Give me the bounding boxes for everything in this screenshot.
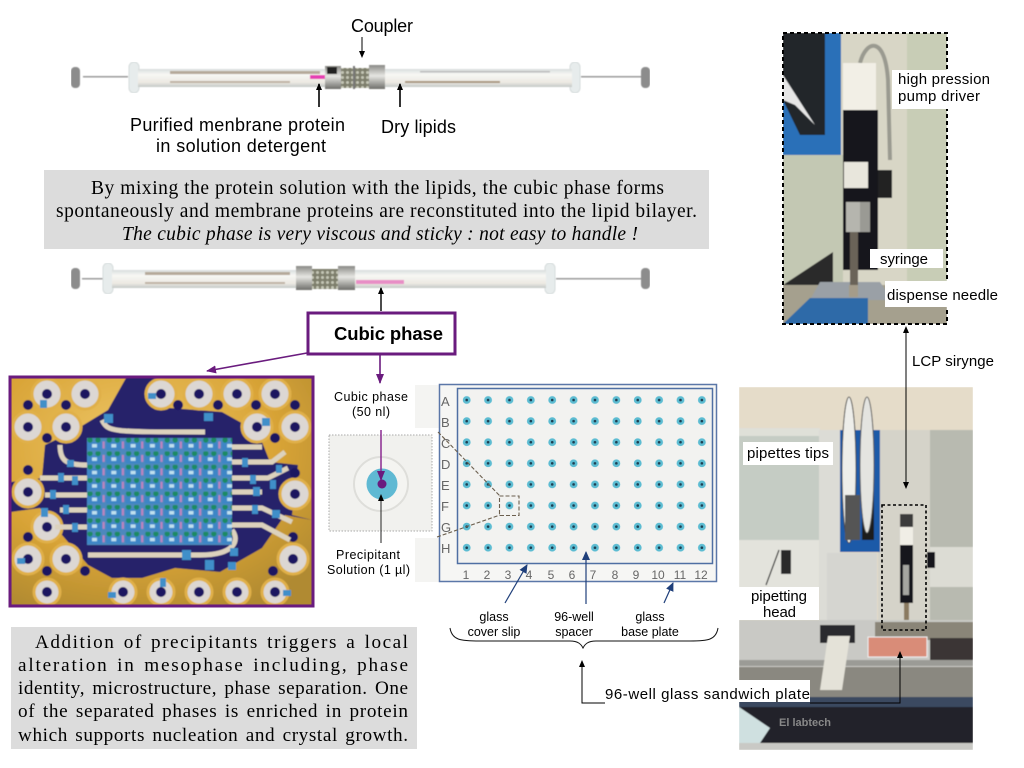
label: dry lipids: Dry lipids: [381, 117, 456, 137]
label: cubic phase volume: (50 nl): [352, 405, 390, 419]
inset: cubic phase drop: [329, 435, 432, 531]
column labels: 1: [463, 568, 470, 582]
text panel: precipitant: of the separated phases is enriched in protein: [18, 701, 408, 722]
column labels: 2: [484, 568, 491, 582]
photo: LCP syringe pump: [783, 33, 999, 324]
label: cubic phase volume: [334, 390, 408, 419]
label: LCP syringe: LCP sirynge: [912, 353, 994, 370]
arrow: purple to drop: [379, 355, 381, 383]
label: glass base plate: glass: [635, 610, 665, 624]
label: purified membrane protein: Purified menbrane protein: [130, 115, 345, 135]
text panel: cubic phase formation: spontaneously and membrane proteins are reconstituted into the lipid bilayer.: [56, 201, 697, 222]
connector: LCP syringe double arrow: [905, 327, 907, 488]
photo: pipetting robot: [739, 387, 973, 750]
arrow: dry lipids: [399, 84, 401, 107]
label: precipitant solution: Precipitant: [336, 548, 401, 562]
connector: plate to sandwich plate arrows: [582, 652, 900, 703]
label: pump driver: high pression: [898, 71, 990, 88]
text panel: cubic phase formation: The cubic phase is very viscous and sticky : not easy to handle !: [122, 224, 638, 245]
text panel: cubic phase formation: By mixing the protein solution with the lipids, the cubic phase forms: [91, 178, 664, 199]
column labels: 5: [548, 568, 555, 582]
label: pipetting head: head: [763, 604, 796, 621]
column labels: 10: [651, 568, 665, 582]
row labels: D: [441, 457, 450, 472]
96-well plate: [440, 384, 716, 582]
arrow: to cubic phase: [380, 288, 382, 311]
arrow: protein: [318, 84, 320, 107]
label: glass cover slip: glass: [479, 610, 509, 624]
column labels: 7: [590, 568, 597, 582]
label: glass base plate: base plate: [621, 625, 679, 639]
label: dispense needle: dispense needle: [887, 287, 998, 304]
row labels: A: [441, 394, 450, 409]
column labels: 8: [612, 568, 619, 582]
label: purified membrane protein: in solution detergent: [156, 136, 326, 156]
syringe 1 with coupler: [71, 62, 650, 93]
label: precipitant solution: Solution (1 µl): [327, 563, 410, 577]
row labels: [441, 394, 451, 556]
text panel: precipitant: Addition of precipitants triggers a local: [35, 632, 408, 653]
line: precipitant pointer: [380, 495, 382, 543]
brace under plate: [450, 628, 718, 648]
row labels: B: [441, 415, 450, 430]
row labels: H: [441, 541, 450, 556]
label: coupler: Coupler: [351, 16, 413, 36]
label: glass base plate: [621, 610, 679, 639]
illustration: lipidic cubic phase: [10, 377, 313, 606]
row labels: G: [441, 520, 451, 535]
label: pipettes tips: [743, 442, 833, 465]
text panel: cubic phase formation: [44, 170, 709, 249]
label: syringe: [870, 249, 943, 268]
photo: pipetting robot: El labtech: [779, 717, 831, 729]
arrow: spacer: [585, 552, 587, 604]
row labels: F: [441, 499, 449, 514]
column labels: [463, 568, 708, 582]
label: purified membrane protein: [130, 115, 345, 156]
row labels: E: [441, 478, 450, 493]
label: syringe: syringe: [880, 251, 928, 268]
label: precipitant solution: [327, 548, 410, 577]
text panel: precipitant: alteration in mesophase including, phase: [18, 655, 408, 676]
label: pump driver: pump driver: [898, 88, 980, 105]
text panel: precipitant: identity, microstructure, phase separation. One: [18, 678, 408, 699]
light background behind plate inset: [415, 385, 439, 582]
label: glass cover slip: [468, 610, 520, 639]
label: glass cover slip: cover slip: [468, 625, 520, 639]
column labels: 4: [526, 568, 533, 582]
column labels: 9: [633, 568, 640, 582]
text panel: precipitant: [11, 627, 417, 749]
column labels: 11: [674, 568, 687, 582]
label: 96-well glass sandwich plate: 96-well glass sandwich plate: [605, 686, 810, 703]
label: cubic phase volume: Cubic phase: [334, 390, 408, 404]
box: cubic phase heading: [308, 313, 455, 354]
label: dispense needle: [885, 281, 999, 307]
row labels: C: [441, 436, 450, 451]
column labels: 12: [694, 568, 708, 582]
label: 96-well spacer: [554, 610, 594, 639]
line: cubic phase pointer: [380, 430, 382, 480]
column labels: 3: [505, 568, 512, 582]
label: pump driver: [892, 70, 990, 109]
wells grid: [456, 390, 713, 558]
column labels: 6: [569, 568, 576, 582]
label: 96-well spacer: spacer: [555, 625, 593, 639]
zoom guide to well F3: [437, 432, 519, 537]
arrow: coupler: [361, 37, 363, 57]
box: cubic phase heading: Cubic phase: [334, 323, 443, 344]
arrow: base plate: [664, 583, 673, 603]
label: pipetting head: [739, 587, 819, 621]
label: pipettes tips: pipettes tips: [747, 445, 829, 462]
label: pipetting head: pipetting: [751, 588, 807, 605]
arrow: purple to lattice: [207, 353, 307, 371]
label: 96-well spacer: 96-well: [554, 610, 594, 624]
syringe 2 with cubic phase: [71, 263, 650, 294]
arrow: cover slip: [505, 565, 527, 603]
text panel: precipitant: which supports nucleation and crystal growth.: [18, 725, 408, 746]
